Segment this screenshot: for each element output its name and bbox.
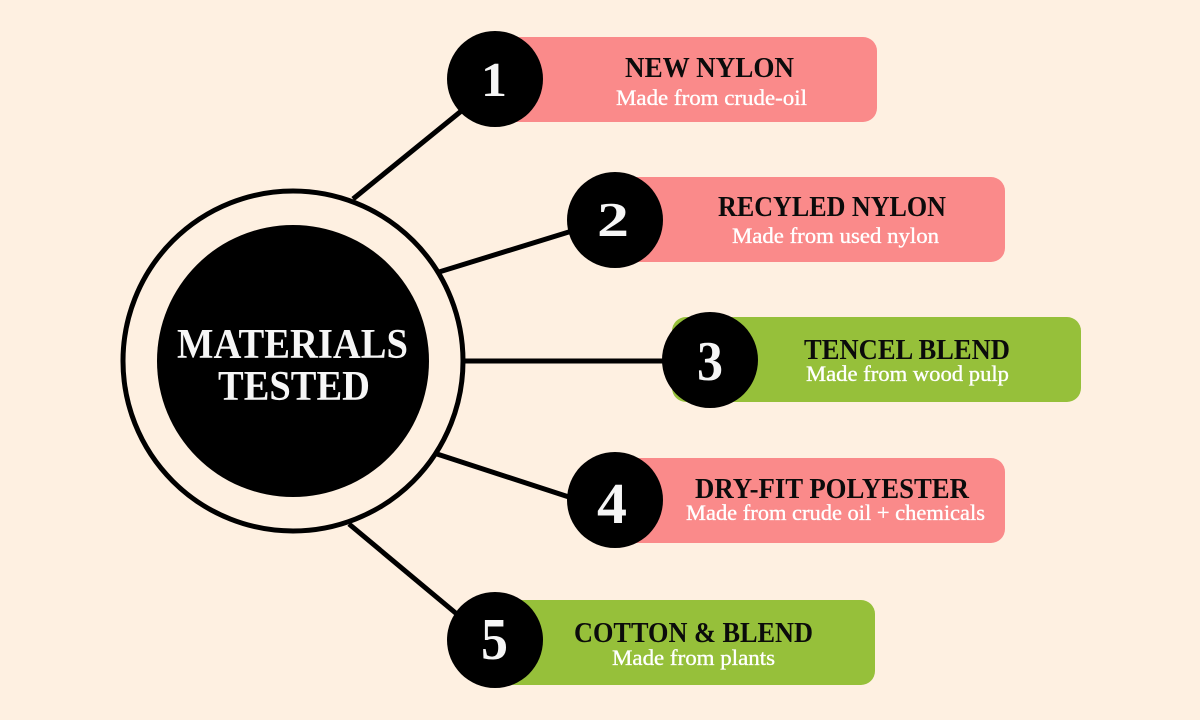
item 5: cotton & blend: 5 [481,606,508,672]
item 3: tencel blend: Made from wood pulp [806,361,1009,386]
item 3: tencel blend: 3 [697,331,723,393]
item 5: cotton & blend: COTTON & BLEND [574,618,813,649]
item 4: dry-fit polyester: 4 [597,471,627,536]
item 1: new nylon: 1 [481,52,507,107]
central hub: materials tested: MATERIALS [177,322,408,368]
item 5: cotton & blend [447,592,875,688]
item 4: dry-fit polyester: DRY-FIT POLYESTER [695,474,970,505]
item 3: tencel blend: TENCEL BLEND [804,335,1010,366]
item 4: dry-fit polyester: Made from crude oil + chemicals [686,500,985,525]
central hub: materials tested [123,191,463,531]
item 2: recycled nylon: Made from used nylon [732,223,939,248]
item 5: cotton & blend: Made from plants [612,645,775,670]
item 3: tencel blend [662,312,1081,408]
item 2: recycled nylon [567,172,1005,268]
item 1: new nylon: NEW NYLON [625,53,794,84]
item 1: new nylon: Made from crude-oil [616,85,807,110]
item 4: dry-fit polyester [567,452,1005,548]
item 1: new nylon [447,31,877,127]
item 2: recycled nylon: 2 [597,192,629,247]
connector lines [349,108,665,615]
item 2: recycled nylon: RECYLED NYLON [718,192,946,223]
central hub: materials tested: TESTED [218,364,370,410]
